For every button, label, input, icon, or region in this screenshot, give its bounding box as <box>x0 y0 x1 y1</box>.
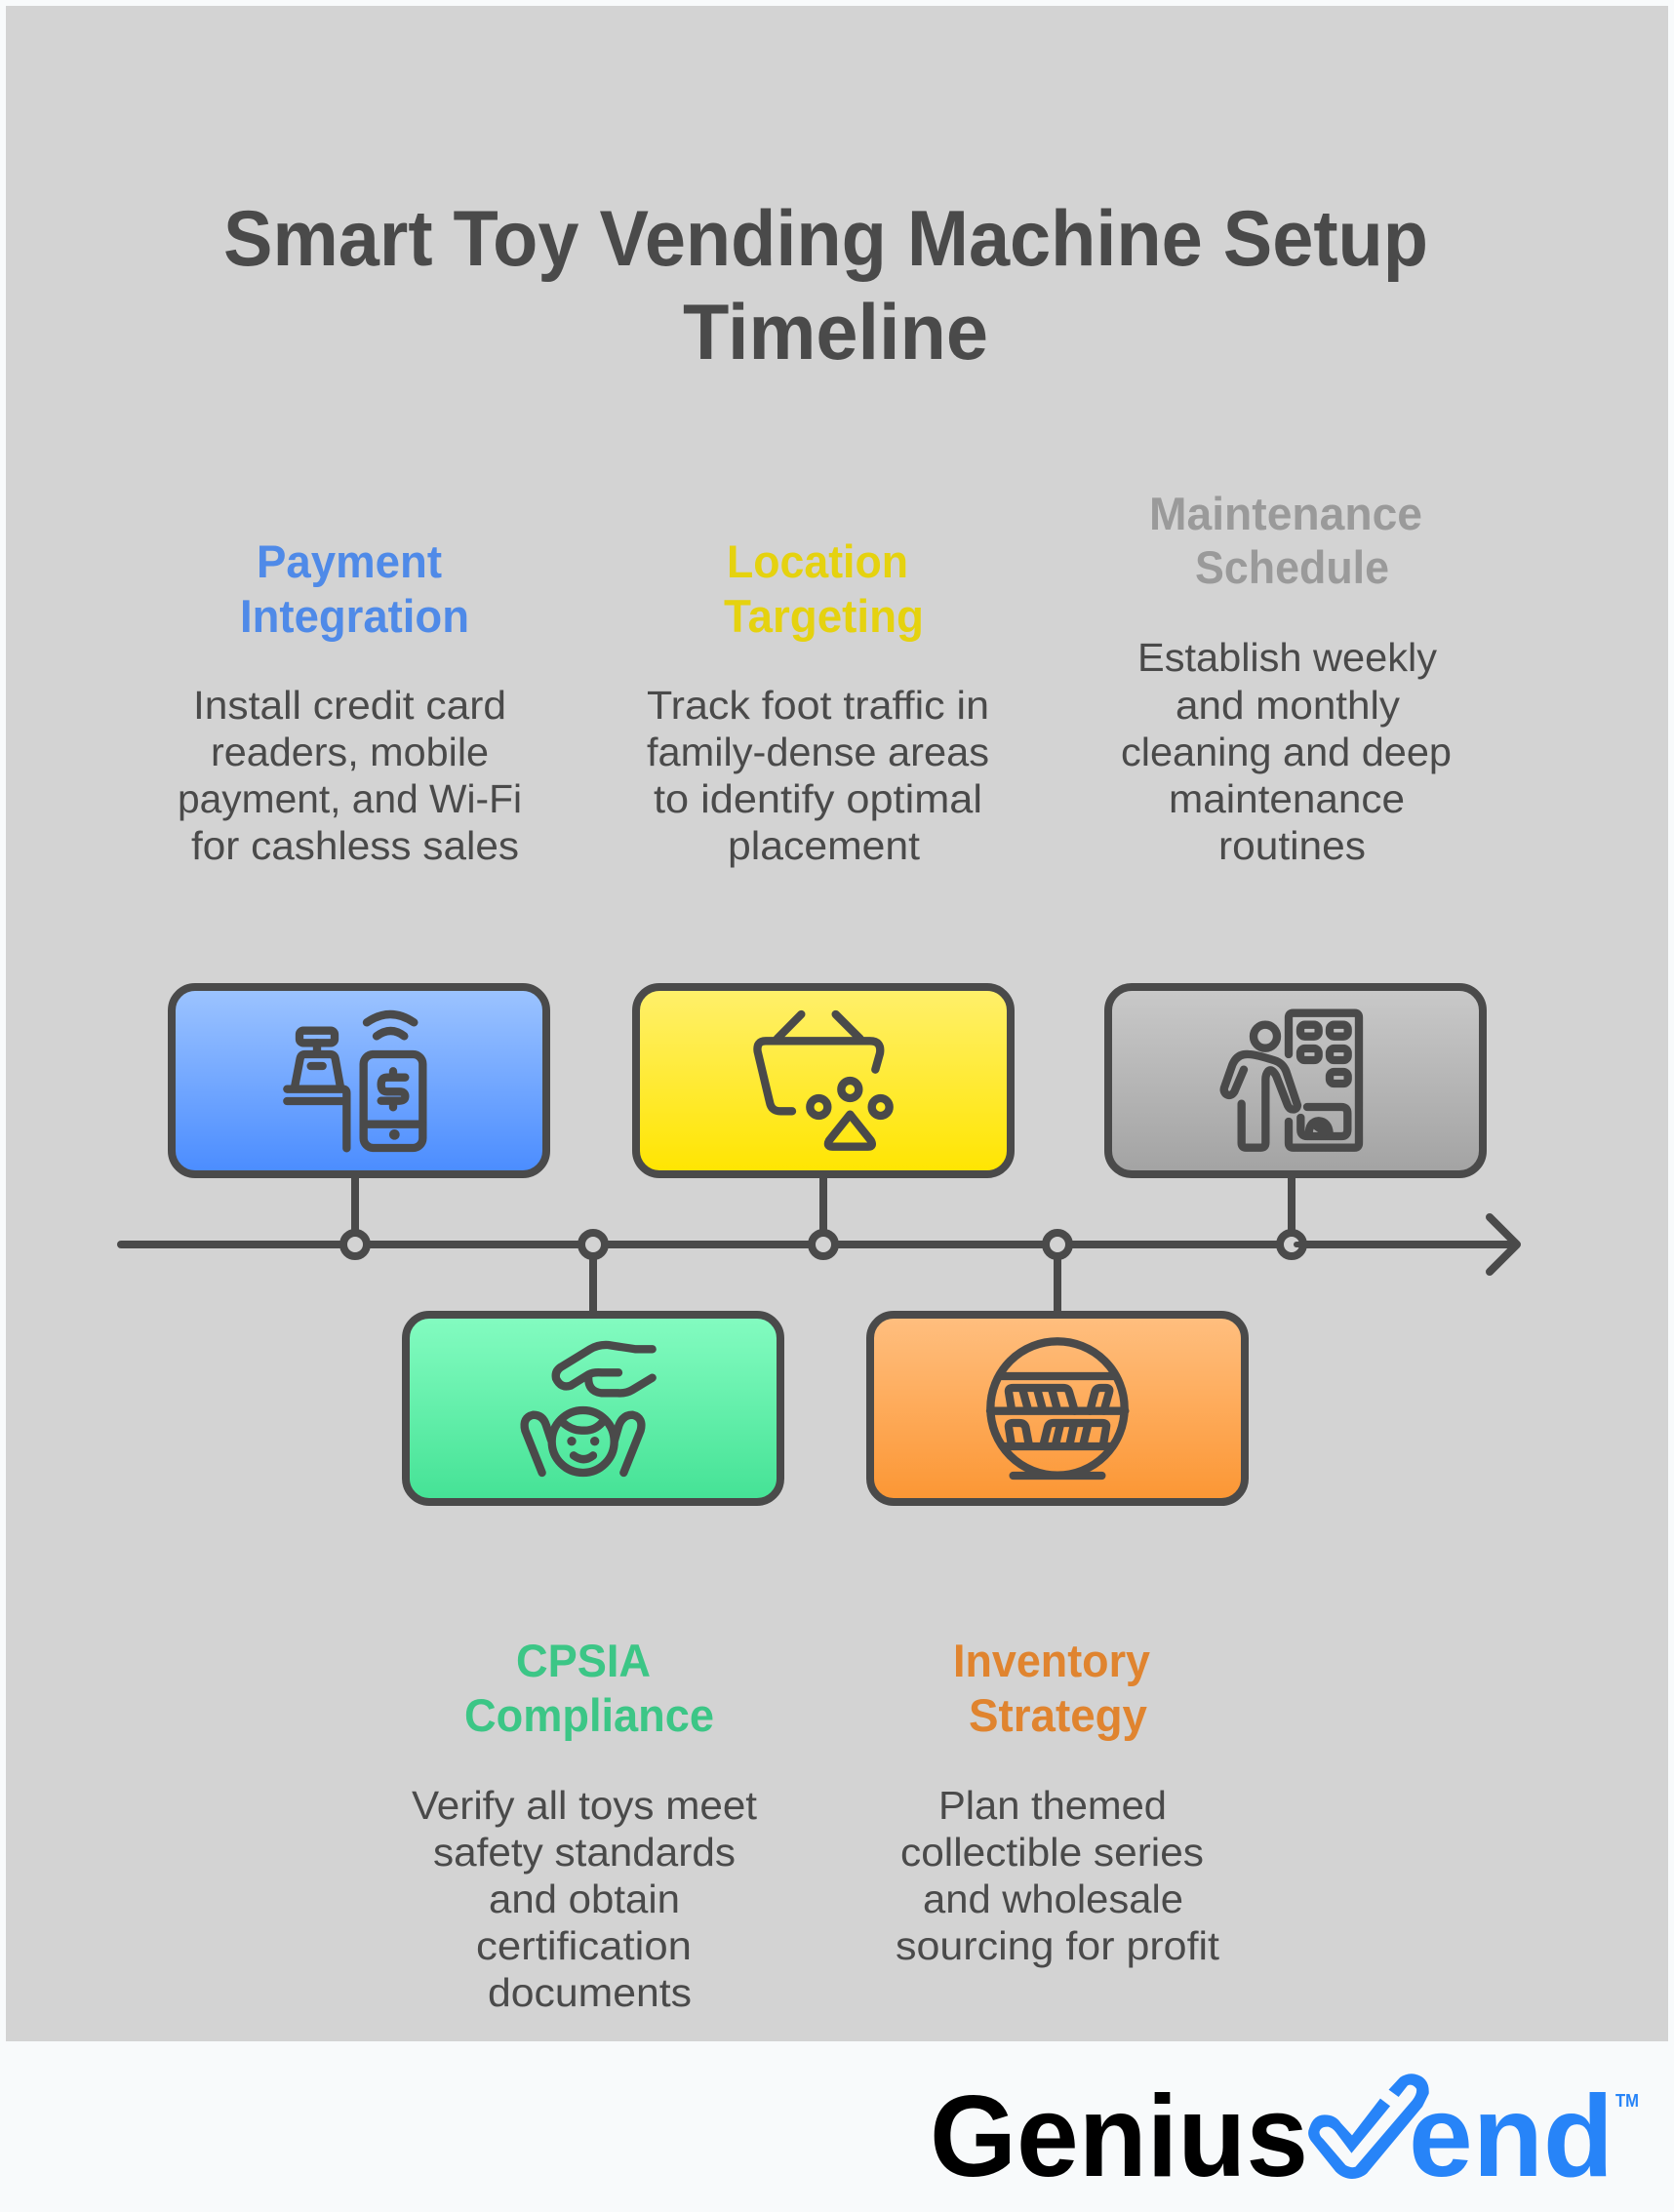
description: CPSIA Compliance: certification <box>476 1923 692 1968</box>
heading: Payment Integration: Integration <box>240 590 469 642</box>
heading: Inventory Strategy: Strategy <box>969 1689 1147 1741</box>
heading: Maintenance Schedule: Maintenance <box>1149 488 1422 539</box>
logo: GeniusVend: TM <box>1615 2091 1639 2111</box>
description: CPSIA Compliance: safety standards <box>433 1830 736 1875</box>
logo: GeniusVend: end <box>1409 2072 1614 2201</box>
icon: basket with paw print <box>757 1014 890 1147</box>
icon: person at vending machine <box>1224 1013 1359 1148</box>
heading: Maintenance Schedule: Schedule <box>1195 541 1389 593</box>
description: Inventory Strategy: Plan themed <box>938 1783 1167 1828</box>
text block: Payment Integration <box>178 535 522 868</box>
description: Payment Integration: Install credit card <box>193 683 506 728</box>
description: Maintenance Schedule: maintenance <box>1169 776 1405 821</box>
card: CPSIA Compliance <box>406 1315 780 1502</box>
description: CPSIA Compliance <box>412 1783 758 2015</box>
description: Maintenance Schedule <box>1121 635 1452 868</box>
logo check mark <box>1308 2074 1429 2179</box>
heading: Payment Integration <box>240 535 469 642</box>
timeline axis with arrow <box>121 1217 1517 1272</box>
description: Payment Integration: payment, and Wi-Fi <box>178 776 522 821</box>
description: Maintenance Schedule: and monthly <box>1176 683 1401 728</box>
description: Inventory Strategy: sourcing for profit <box>896 1923 1220 1968</box>
heading: Maintenance Schedule <box>1149 488 1422 593</box>
description: Location Targeting: Track foot traffic in <box>647 683 989 728</box>
title <box>223 195 1428 376</box>
icon: round toy shelf <box>990 1341 1125 1476</box>
description: Inventory Strategy <box>896 1783 1220 1968</box>
description: Payment Integration: for cashless sales <box>191 823 519 868</box>
card: Maintenance Schedule <box>1108 987 1483 1174</box>
heading: Inventory Strategy <box>953 1635 1150 1741</box>
description: Maintenance Schedule: Establish weekly <box>1137 635 1438 680</box>
description: Location Targeting <box>647 683 989 868</box>
text block: Inventory Strategy <box>896 1635 1220 1968</box>
title: Timeline <box>683 289 988 376</box>
heading: Location Targeting: Location <box>727 535 908 587</box>
timeline markers <box>343 1233 1303 1256</box>
heading: CPSIA Compliance: Compliance <box>464 1689 714 1741</box>
description: CPSIA Compliance: and obtain <box>489 1876 680 1921</box>
description: Payment Integration <box>178 683 522 868</box>
description: Location Targeting: to identify optimal <box>654 776 982 821</box>
heading: Location Targeting: Targeting <box>724 590 924 642</box>
description: Maintenance Schedule: routines <box>1218 823 1366 868</box>
description: CPSIA Compliance: documents <box>488 1970 692 2015</box>
heading: CPSIA Compliance <box>464 1635 714 1741</box>
description: Inventory Strategy: collectible series <box>900 1830 1204 1875</box>
heading: CPSIA Compliance: CPSIA <box>516 1635 651 1686</box>
text block: CPSIA Compliance <box>412 1635 758 2015</box>
text block: Location Targeting <box>647 535 989 868</box>
connectors from cards to timeline <box>355 1174 1292 1315</box>
card: Payment Integration <box>172 987 546 1174</box>
description: Payment Integration: readers, mobile <box>211 730 489 774</box>
description: Inventory Strategy: and wholesale <box>923 1876 1183 1921</box>
title: Smart Toy Vending Machine Setup <box>223 195 1428 283</box>
text block: Maintenance Schedule <box>1121 488 1452 868</box>
description: Location Targeting: family-dense areas <box>647 730 989 774</box>
heading: Location Targeting <box>724 535 924 642</box>
logo: GeniusVend <box>930 2072 1639 2201</box>
description: Maintenance Schedule: cleaning and deep <box>1121 730 1452 774</box>
heading: Payment Integration: Payment <box>257 535 442 587</box>
description: Location Targeting: placement <box>728 823 921 868</box>
card: Location Targeting <box>636 987 1011 1174</box>
description: CPSIA Compliance: Verify all toys meet <box>412 1783 758 1828</box>
card: Inventory Strategy <box>870 1315 1245 1502</box>
icon: hand over child <box>525 1345 653 1473</box>
icon: cash register and phone payment <box>287 1014 422 1148</box>
heading: Inventory Strategy: Inventory <box>953 1635 1150 1686</box>
logo: GeniusVend: Genius <box>930 2072 1308 2201</box>
